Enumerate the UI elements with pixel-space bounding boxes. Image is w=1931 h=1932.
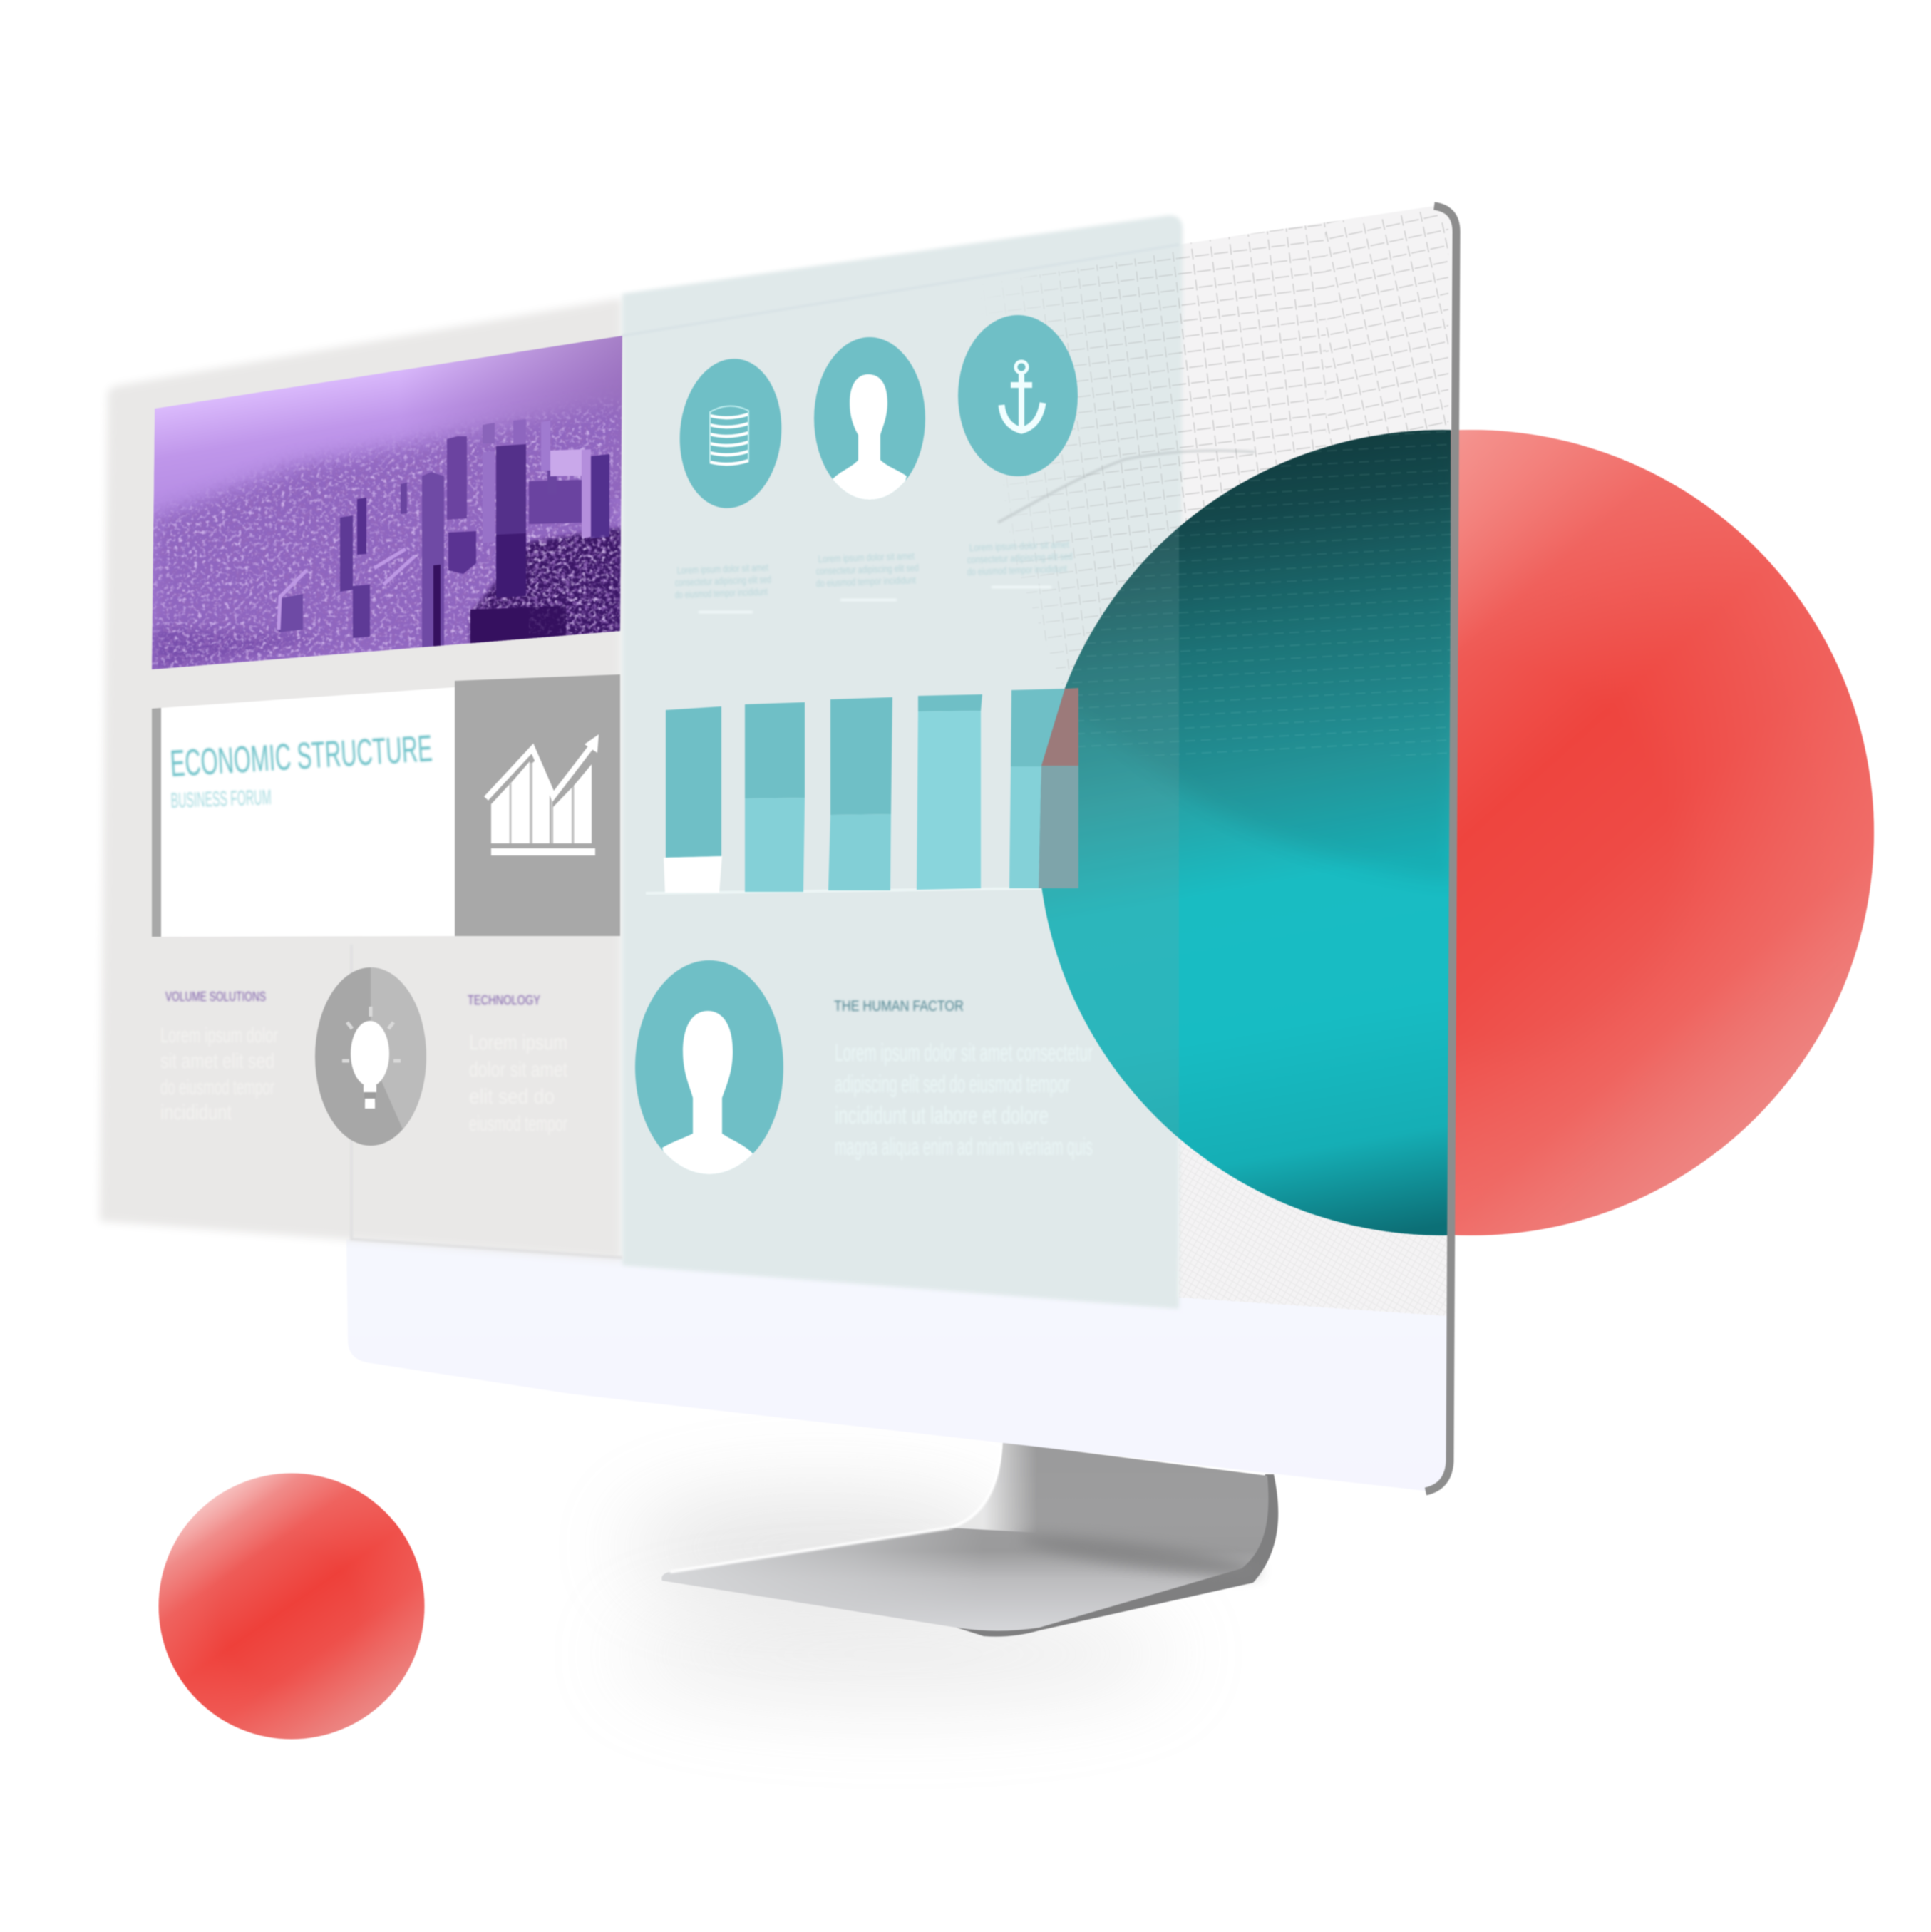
- icon: large person circle: [635, 960, 783, 1183]
- caption under anchor: Lorem ipsum dolor sit amet: [969, 538, 1069, 553]
- right text column body: elit sed do: [469, 1085, 555, 1109]
- monitor chin: [346, 1239, 1447, 1491]
- right text column body: Lorem ipsum: [469, 1031, 567, 1054]
- caption under person: do eiusmod tempor incididunt: [816, 574, 916, 589]
- heading: the human factor: THE HUMAN FACTOR: [834, 998, 964, 1014]
- monitor glass backing: [1179, 206, 1451, 1316]
- stand neck highlight: [950, 1442, 1037, 1533]
- caption under coins: [675, 562, 771, 613]
- chart baseline: [646, 888, 1041, 893]
- icon: light bulb circle: [315, 967, 426, 1146]
- glass top edge line: [622, 245, 1179, 336]
- wire mesh upper right: [977, 210, 1448, 684]
- glass left edge line: [351, 945, 622, 1258]
- card accent strip: [152, 708, 161, 937]
- small red sphere: [158, 1473, 425, 1740]
- bar 4: [917, 694, 982, 890]
- icon: coins circle: [674, 354, 788, 513]
- dark district texture: [529, 535, 622, 634]
- left text column body: [160, 1024, 278, 1124]
- left text column body: do eiusmod tempor: [160, 1076, 274, 1099]
- panel: grey slide: [100, 298, 622, 1260]
- stand foot tip highlight: [661, 1528, 998, 1634]
- stand crease: [1019, 1527, 1262, 1584]
- heading: economic structure: ECONOMIC STRUCTURE: [169, 728, 433, 785]
- human factor body text: adipiscing elit sed do eiusmod tempor: [835, 1071, 1070, 1098]
- dark cap of the sphere: [1158, 632, 1448, 877]
- ground: [152, 412, 622, 669]
- monitor rim: [1426, 206, 1456, 1491]
- human factor body text: magna aliqua enim ad minim veniam quis: [835, 1134, 1093, 1161]
- city photo: [151, 335, 623, 670]
- left text column heading: VOLUME SOLUTIONS: [165, 990, 266, 1004]
- right text column body: [469, 1031, 568, 1136]
- bar 2: [745, 702, 805, 892]
- panel: teal slide: [622, 215, 1183, 1309]
- bar 1: [664, 706, 722, 893]
- caption under coins: consectetur adipiscing elit sed: [675, 573, 771, 588]
- caption under person: [816, 550, 919, 601]
- ground texture: [151, 401, 622, 669]
- skyscrapers: [279, 419, 609, 649]
- human factor body text: Lorem ipsum dolor sit amet consectetur: [835, 1039, 1093, 1067]
- stand dark side edge: [957, 1474, 1278, 1637]
- left text column body: Lorem ipsum dolor: [160, 1024, 278, 1047]
- subheading: business forum: BUSINESS FORUM: [170, 786, 272, 813]
- caption under coins: do eiusmod tempor incididunt: [675, 585, 768, 600]
- icon: anchor circle: [958, 315, 1078, 476]
- bar 3: [828, 697, 892, 890]
- right text column heading: TECHNOLOGY: [468, 993, 540, 1007]
- caption under coins: Lorem ipsum dolor sit amet: [677, 562, 768, 576]
- stand body: [661, 1442, 1268, 1631]
- right text column body: dolor sit amet: [469, 1058, 568, 1081]
- left text column body: sit amet elit sed: [160, 1049, 274, 1073]
- card: grey chart panel: [455, 674, 620, 936]
- stacked bar chart: [646, 688, 1078, 893]
- icon: growth chart: [486, 734, 599, 855]
- card: economic structure: [152, 687, 455, 937]
- caption under anchor: do eiusmod tempor incididunt: [967, 562, 1067, 577]
- sky: [152, 336, 622, 669]
- caption under anchor: [967, 538, 1073, 588]
- caption under person: Lorem ipsum dolor sit amet: [818, 550, 915, 565]
- wire mesh lower right: [1179, 1141, 1447, 1316]
- teal refracted sphere: [1039, 429, 1451, 1236]
- icon: person circle: [814, 337, 925, 506]
- caption under anchor: consectetur adipiscing elit sed: [967, 550, 1073, 565]
- stand shadow: [620, 1497, 1176, 1704]
- left text column body: incididunt: [160, 1101, 232, 1124]
- caption under person: consectetur adipiscing elit sed: [816, 562, 919, 577]
- right text column body: eiusmod tempor: [469, 1112, 567, 1136]
- large red sphere: [1069, 430, 1874, 1235]
- monitor stand: [661, 1442, 1278, 1637]
- human factor body text: [835, 1039, 1093, 1161]
- bar 5: [1009, 688, 1078, 888]
- card white area: [161, 687, 455, 937]
- human factor body text: incididunt ut labore et dolore: [835, 1102, 1049, 1129]
